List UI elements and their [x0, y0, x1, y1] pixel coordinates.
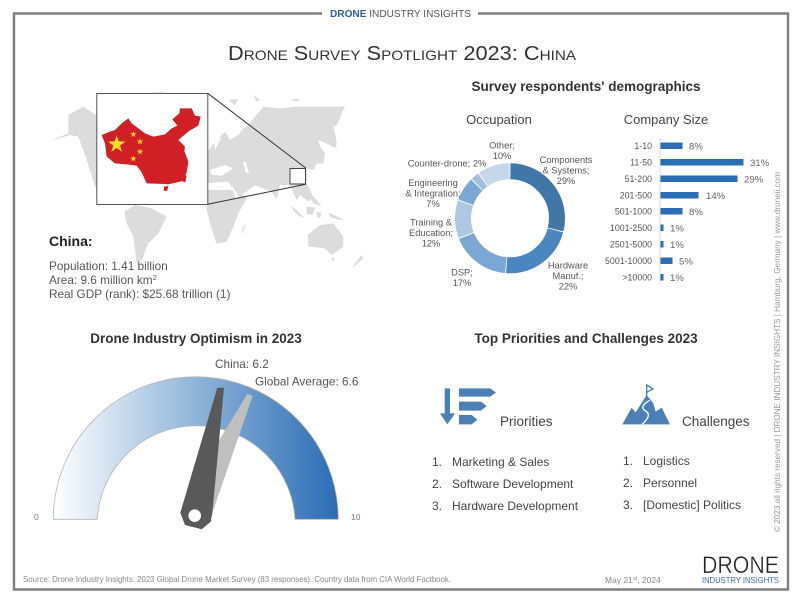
zoom connector lines	[208, 93, 306, 204]
bar chart: company size: 2501-5000	[610, 240, 652, 250]
icon: challenges	[622, 385, 670, 424]
heading: occupation: Occupation	[466, 112, 532, 127]
gauge labels	[215, 357, 359, 388]
priorities list: 3.	[432, 499, 442, 513]
priorities list: 1.	[432, 455, 442, 469]
date: st	[633, 576, 638, 582]
bar chart: company size: 1%	[670, 240, 684, 251]
donut labels	[405, 140, 593, 292]
icon: priorities	[440, 388, 496, 424]
gauge labels: China: 6.2	[215, 357, 269, 371]
challenges list: 2.	[623, 476, 633, 490]
donut labels: Engineering	[408, 178, 458, 188]
China heading: China:	[49, 233, 93, 249]
needle: China	[180, 388, 224, 529]
logo: DRONE	[702, 552, 779, 579]
donut labels: 7%	[426, 199, 440, 209]
bar chart: company size: 501-1000	[615, 206, 652, 216]
donut labels: Counter-drone; 2%	[408, 158, 486, 168]
heading: optimism: Drone Industry Optimism in 2023	[90, 331, 302, 346]
donut labels: & Systems;	[542, 166, 590, 176]
bar chart: company size: 31%	[750, 158, 770, 169]
challenges list: 1.	[623, 454, 633, 468]
world map	[48, 92, 363, 269]
bar chart: company size: 1-10	[634, 141, 652, 151]
priorities list	[432, 455, 579, 513]
donut labels: Education;	[409, 228, 453, 238]
bar chart: company size: 201-500	[620, 190, 652, 200]
date: , 2024	[637, 575, 661, 585]
donut labels: DSP;	[451, 268, 473, 278]
bar chart: company size: 1%	[670, 224, 684, 234]
needle: global average	[211, 394, 253, 517]
gauge scale: 10	[351, 512, 361, 522]
bar chart: company size: 1001-2500	[610, 223, 652, 233]
title: Drone Survey Spotlight 2023: China	[228, 43, 577, 65]
heading: company size: Company Size	[624, 112, 708, 127]
China facts: 2	[153, 273, 157, 282]
bar chart: company size: 8%	[689, 142, 703, 152]
gauge labels: Global Average: 6.6	[255, 374, 359, 388]
header brand: DRONE INDUSTRY INSIGHTS	[330, 9, 471, 20]
donut labels: Hardware	[548, 260, 588, 270]
map locator square	[290, 168, 306, 184]
China facts: Area: 9.6 million km	[49, 273, 153, 287]
gauge scale	[34, 512, 361, 522]
bar chart: company size: 5001-10000	[605, 256, 652, 266]
challenges list: Logistics	[643, 454, 690, 468]
China facts: Population: 1.41 billion	[49, 259, 168, 273]
challenges list: Personnel	[643, 476, 697, 490]
challenges list	[623, 454, 741, 512]
needle pin	[188, 509, 201, 522]
challenges list: 3.	[623, 498, 633, 512]
challenges label: Challenges	[682, 414, 750, 429]
China facts: Real GDP (rank): $25.68 trillion (1)	[49, 287, 230, 301]
bar chart: company size: 8%	[689, 207, 703, 218]
priorities list: Software Development	[452, 477, 574, 491]
China facts	[49, 259, 230, 301]
date: May 21	[605, 575, 633, 585]
donut labels: 10%	[493, 151, 511, 161]
source note: Source: Drone Industry Insights: 2023 Global Drone Market Survey (83 responses). Country data from CIA World Factbook.	[23, 574, 451, 584]
gauge scale: 0	[34, 512, 39, 522]
heading: priorities and challenges: Top Priorities and Challenges 2023	[474, 331, 698, 346]
donut labels: Training &	[410, 218, 453, 228]
donut labels: Manuf.;	[552, 271, 584, 281]
vertical copyright: © 2023 all rights reserved | DRONE INDUSTRY INSIGHTS | Hamburg, Germany | www.droneii.com	[772, 172, 782, 532]
logo: INDUSTRY INSIGHTS	[702, 576, 779, 585]
bar chart: company size: 1%	[670, 273, 684, 284]
bar chart: company size: 51-200	[625, 174, 652, 184]
bar chart: company size: 14%	[706, 191, 726, 202]
priorities list: Hardware Development	[452, 499, 579, 513]
priorities list: 2.	[432, 477, 442, 491]
donut labels: 17%	[453, 278, 471, 288]
bar chart: company size	[605, 138, 770, 285]
donut labels: Other;	[489, 140, 515, 150]
gauge	[53, 377, 338, 529]
donut labels: 22%	[559, 282, 577, 292]
bar chart: company size: 11-50	[630, 158, 652, 168]
heading: demographics: Survey respondents' demographics	[471, 79, 701, 94]
challenges list: [Domestic] Politics	[643, 498, 741, 512]
donut labels: Components	[540, 155, 593, 165]
donut labels: 12%	[422, 238, 440, 248]
priorities label: Priorities	[500, 414, 553, 429]
priorities list: Marketing & Sales	[452, 455, 549, 469]
bar chart: company size: 29%	[744, 174, 764, 186]
inset: China flag map	[97, 94, 208, 204]
donut chart	[463, 171, 557, 265]
bar chart: company size: >10000	[622, 272, 652, 282]
donut labels: 29%	[557, 176, 575, 186]
bar chart: company size: 5%	[679, 256, 693, 268]
donut labels: & Integration;	[405, 188, 461, 198]
